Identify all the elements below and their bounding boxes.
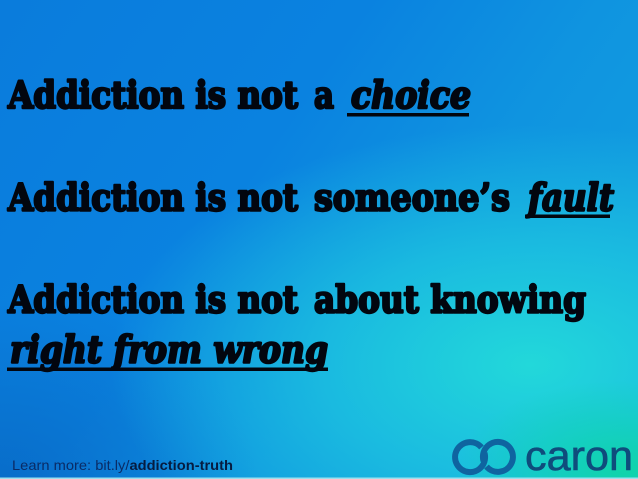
source link text: Learn more: bit.ly/ addiction-truth: [12, 457, 233, 473]
line 2: Addiction is not someone's fault: someone’s: [314, 176, 510, 220]
line 3: Addiction is not about knowing right from wrong: Addiction is not: [7, 278, 298, 322]
wordmark: caron: [525, 432, 633, 479]
caron logo: [455, 432, 633, 479]
line 2: Addiction is not someone's fault: [7, 176, 614, 220]
line 3: Addiction is not about knowing right from wrong: [7, 278, 586, 372]
line 1: Addiction is not a choice: a: [314, 73, 334, 117]
line 3: Addiction is not about knowing right from wrong: about knowing: [314, 278, 586, 322]
line 2: Addiction is not someone's fault: fault: [525, 176, 614, 220]
bottom edge strip: [0, 478, 638, 479]
line 1: Addiction is not a choice: Addiction is not: [7, 73, 298, 117]
line 3: Addiction is not about knowing right from wrong: right from wrong: [10, 328, 328, 372]
line 1: Addiction is not a choice: choice: [351, 73, 471, 117]
line 2: Addiction is not someone's fault: Addiction is not: [7, 176, 298, 220]
icon: linked rings: [455, 442, 513, 472]
